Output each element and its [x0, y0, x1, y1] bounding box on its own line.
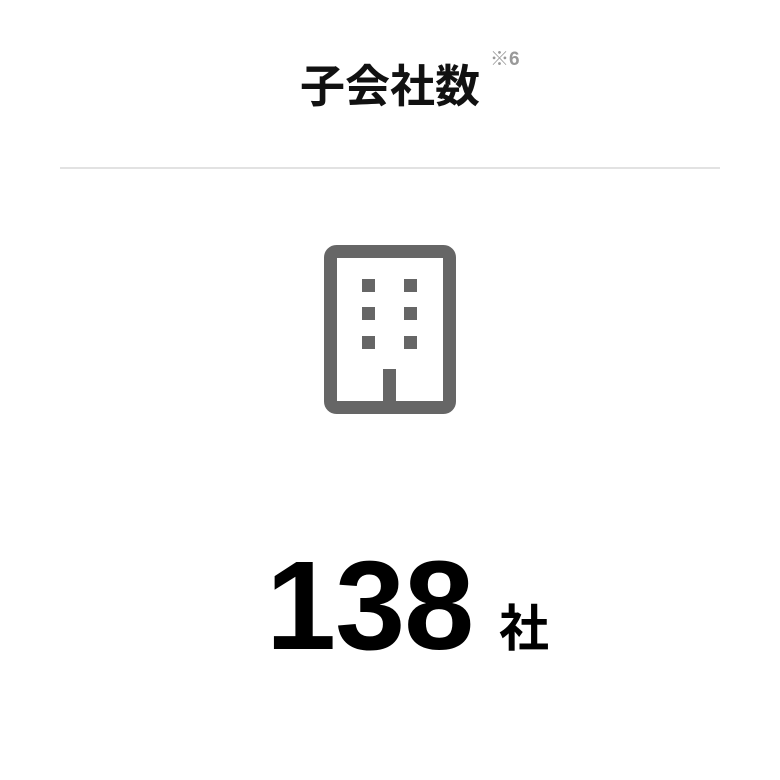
value: 138社: [266, 535, 549, 676]
unit: 社: [499, 601, 549, 657]
footnote mark: ※6: [490, 49, 520, 70]
title text: 子会社数: [300, 61, 480, 112]
number: 138: [266, 535, 473, 676]
title: [300, 49, 520, 112]
